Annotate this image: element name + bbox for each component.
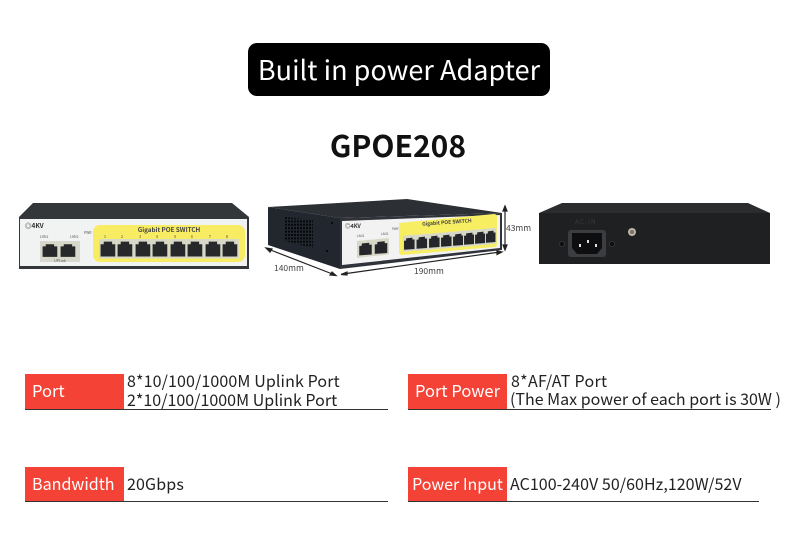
product images — [19, 199, 770, 277]
spec: bandwidth: 20Gbps — [127, 471, 184, 495]
spec: power input: AC100-240V 50/60Hz,120W/52V — [510, 471, 742, 495]
dimension arrows and labels: 140mm — [274, 262, 304, 274]
dimension arrows and labels: 43mm — [506, 222, 531, 234]
rear view switch: AC-IN — [575, 216, 597, 226]
spec: port power: (The Max power of each port is 30W ) — [510, 386, 781, 410]
perspective view switch: LAN1 — [357, 234, 365, 238]
perspective view switch: Gigabit POE SWITCH — [422, 217, 472, 228]
spec: port: Port — [32, 378, 65, 402]
front view switch — [19, 203, 249, 269]
model heading: GPOE208 — [330, 122, 466, 166]
spec: bandwidth — [25, 467, 388, 502]
title banner — [248, 43, 550, 96]
spec: port: 8*10/100/1000M Uplink Port — [127, 368, 340, 392]
spec: port power: 8*AF/AT Port — [511, 368, 607, 392]
front view switch: 6 — [191, 234, 194, 240]
front view switch: 8 — [226, 234, 229, 240]
rear view switch — [539, 203, 770, 264]
front view switch: 1 — [104, 234, 106, 240]
spec: power input: Power Input — [412, 471, 503, 495]
perspective view switch: ◎4KV — [345, 222, 361, 230]
perspective view switch: PWR — [392, 227, 399, 231]
front view switch: PWR — [84, 231, 92, 236]
spec: bandwidth: Bandwidth — [32, 471, 115, 495]
spec: port power — [408, 368, 781, 410]
front view switch: LAN1 — [40, 235, 49, 240]
spec: port power: Port Power — [415, 378, 500, 402]
spec: port: 2*10/100/1000M Uplink Port — [127, 387, 337, 411]
spec: power input — [408, 467, 759, 502]
perspective view switch — [268, 199, 502, 269]
front view switch: 5 — [174, 234, 176, 240]
perspective view switch: LAN2 — [381, 232, 389, 236]
spec: port — [25, 368, 388, 411]
front view switch: 3 — [139, 234, 141, 240]
front view switch: ◎4KV — [25, 220, 45, 230]
front view switch: Gigabit POE SWITCH — [138, 225, 201, 234]
front view switch: UPLink — [54, 259, 66, 264]
front view switch: 2 — [121, 234, 124, 240]
dimension arrows and labels: 190mm — [414, 265, 444, 277]
front view switch: LAN2 — [70, 235, 79, 240]
dimension arrows and labels — [266, 206, 531, 277]
front view switch: 7 — [209, 234, 212, 240]
title banner: Built in power Adapter — [258, 49, 540, 88]
front view switch: 4 — [156, 234, 159, 240]
